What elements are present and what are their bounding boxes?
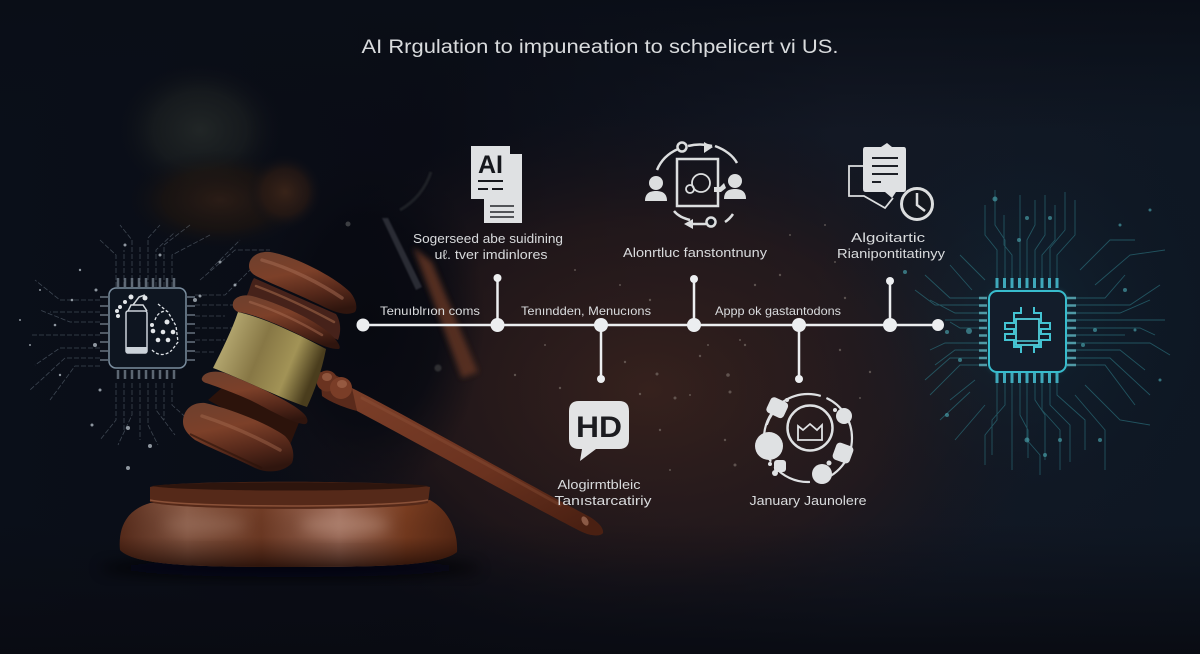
- icon: right chip: [979, 278, 1076, 383]
- icon: HD speech bubble: [569, 401, 629, 461]
- icon: HD speech bubble: HD: [576, 411, 622, 444]
- icon: AI document: [471, 146, 522, 223]
- circuit particles: left: [19, 244, 236, 470]
- circuit pattern: left: [30, 225, 270, 445]
- icon: cycle with people: [645, 142, 746, 229]
- icon: orbit cluster: [755, 394, 855, 484]
- text: first lower label: Tanıstarcatiriy: [554, 493, 652, 508]
- text: first upper label: Sogerseed abe suidining: [413, 231, 563, 246]
- text: first upper label: [413, 231, 563, 262]
- gavel: sound block: [100, 482, 480, 577]
- icon: left chip: [100, 278, 195, 379]
- text: first lower label: [554, 477, 652, 508]
- central particles: [514, 224, 871, 471]
- text: second lower label: January Jaunolere: [750, 493, 866, 508]
- timeline labels: Appp ok gastantodons: [715, 304, 841, 318]
- gavel: head: [183, 252, 356, 471]
- circuit pattern: right: [915, 190, 1170, 475]
- icon: AI document: AI: [478, 151, 503, 179]
- timeline labels: Tenuıblrıon coms: [380, 304, 480, 318]
- icon: document and clock: [849, 143, 932, 220]
- text: first upper label: uℓ. tver imdinlores: [434, 247, 548, 262]
- text: third upper label: [837, 230, 946, 261]
- circuit particles: right: [903, 196, 1162, 457]
- blurred figure behind gavel: [115, 60, 485, 495]
- title: AI Rrgulation to impuneation to schpelicert vi US.: [362, 37, 838, 58]
- timeline labels: Tenındden, Menucıons: [521, 304, 651, 318]
- timeline: [356, 274, 944, 383]
- gavel: handle: [316, 370, 603, 535]
- timeline labels: [380, 304, 841, 318]
- text: second upper label: Alonrtluc fanstontnuny: [623, 245, 768, 260]
- text: first lower label: Alogirmtbleic: [558, 477, 641, 492]
- text: third upper label: Algoitartic: [851, 230, 926, 245]
- text: third upper label: Rianipontitatinyy: [837, 246, 946, 261]
